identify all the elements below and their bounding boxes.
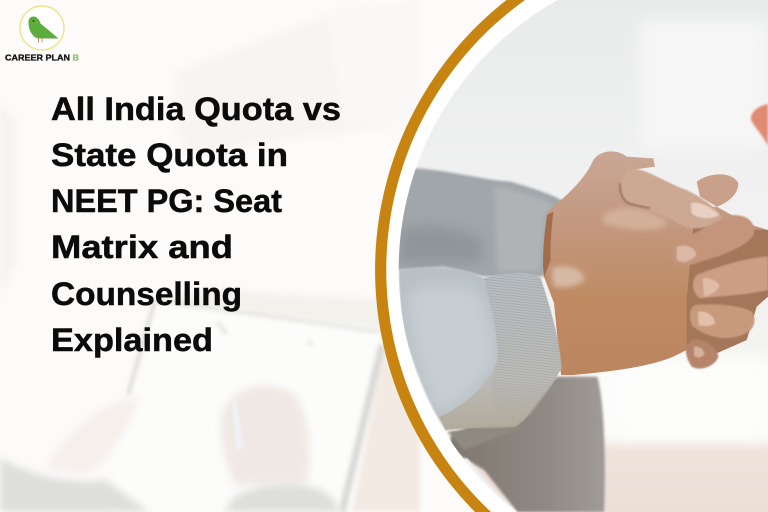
clasped hands <box>543 151 768 375</box>
title: Explained <box>51 322 213 358</box>
faded dark sleeves <box>0 458 340 512</box>
faded background photo <box>0 4 422 512</box>
knitted cuff <box>399 268 561 450</box>
title: Matrix and <box>51 229 233 265</box>
logo badge ring <box>20 6 64 50</box>
red finger at right edge <box>751 104 768 146</box>
clipboard sheet <box>106 306 378 512</box>
title <box>51 91 341 358</box>
title: Counselling <box>51 276 242 312</box>
circular photo of clasped hands <box>380 0 768 512</box>
faded hands <box>45 386 309 485</box>
white border <box>386 0 768 512</box>
title: State Quota in <box>51 137 288 173</box>
logo wordmark: CAREER PLAN B <box>5 52 79 62</box>
dark trousers / lower sleeve <box>451 377 605 512</box>
upper gray sleeve <box>397 168 564 277</box>
thumb <box>621 168 722 228</box>
icon: green bird <box>28 16 58 42</box>
gold ring <box>375 0 768 512</box>
title: NEET PG: Seat <box>51 183 282 219</box>
title: All India Quota vs <box>51 91 341 127</box>
logo <box>5 6 79 62</box>
interlaced fingers <box>672 215 754 265</box>
